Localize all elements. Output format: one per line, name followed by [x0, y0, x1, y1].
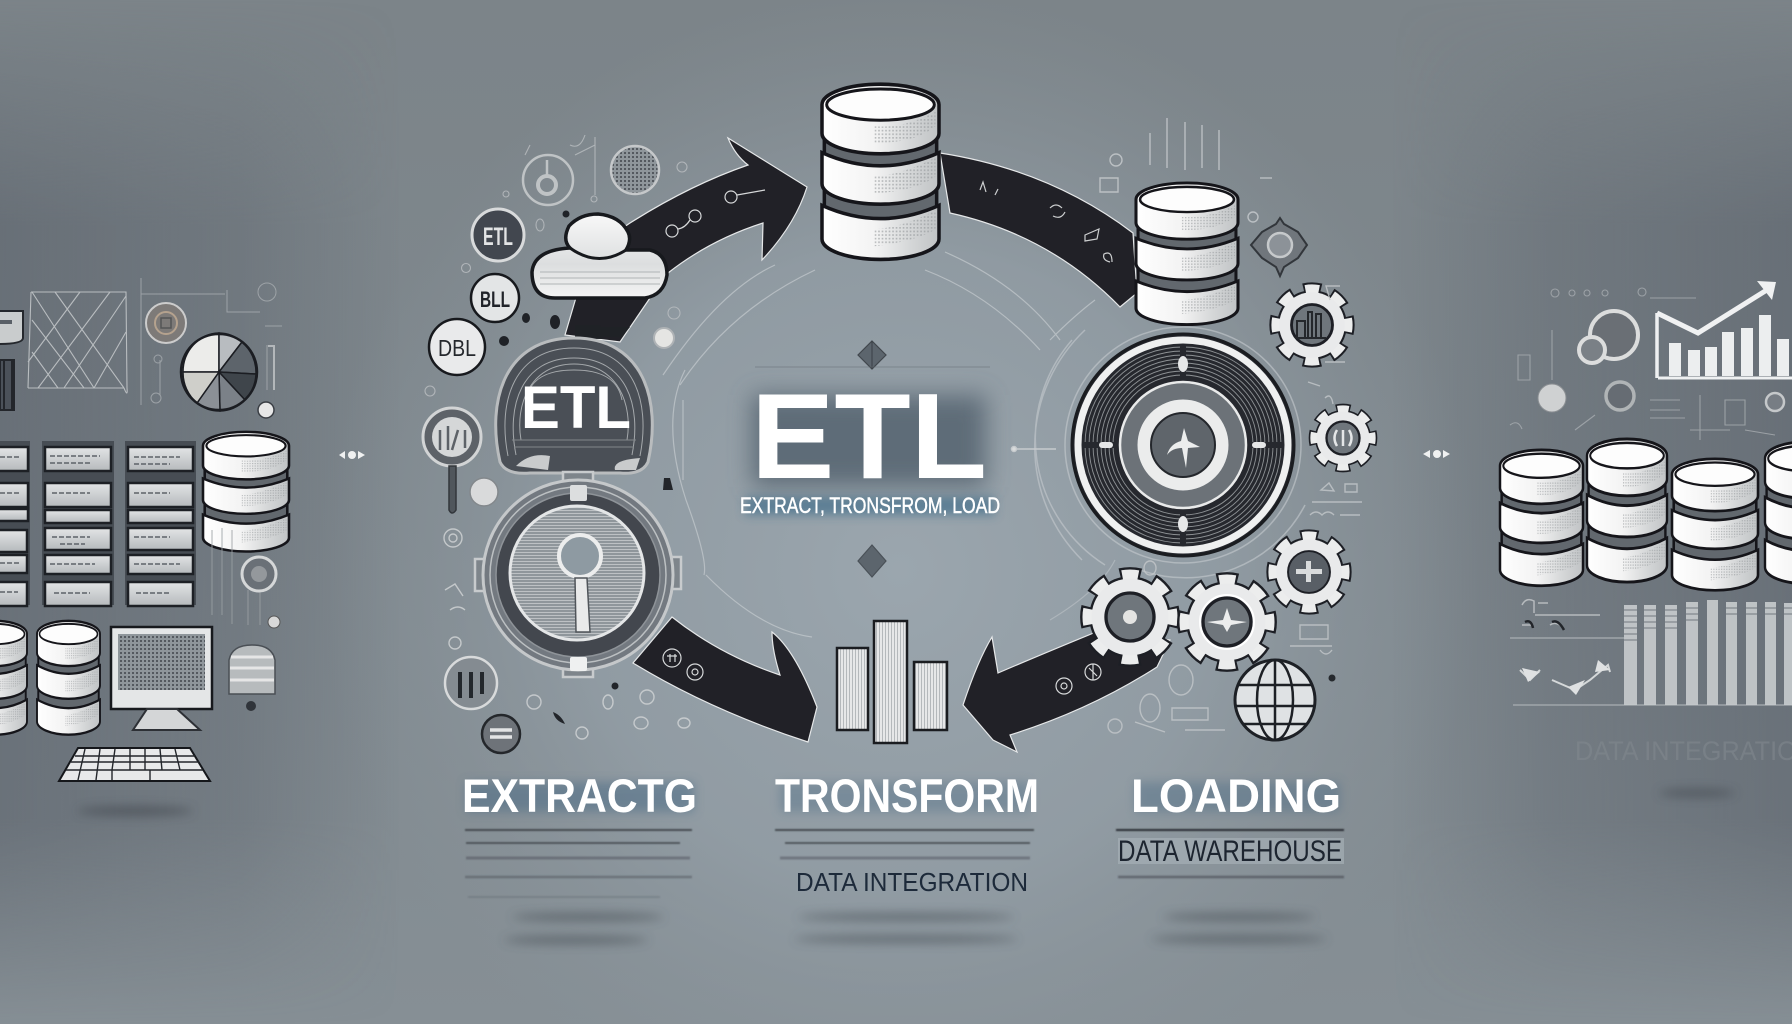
shadows — [794, 913, 1018, 943]
panel: right analytics — [1500, 281, 1792, 797]
frame tabs — [475, 472, 681, 677]
dial — [1035, 327, 1305, 578]
diamond: top — [858, 341, 886, 369]
shadows — [504, 913, 664, 944]
left edge icons — [0, 311, 274, 418]
monitor — [111, 627, 212, 730]
database: top centre — [822, 84, 939, 259]
small decor: top left — [425, 135, 687, 396]
dial pointer — [1012, 446, 1056, 452]
ring — [1606, 382, 1634, 410]
rule lines — [465, 830, 692, 897]
connector: left arrows — [339, 451, 365, 459]
key icon — [559, 535, 601, 632]
mesh diagram — [28, 292, 127, 393]
ring icon — [146, 303, 186, 343]
sub label: DATA INTEGRATION — [796, 867, 1028, 897]
badge: DBL: DBL — [438, 335, 476, 361]
column: transform — [775, 769, 1039, 943]
badge: bars — [445, 657, 497, 709]
heading: EXTRACTG — [462, 769, 697, 822]
faint circle lines — [663, 252, 1115, 637]
shadow — [77, 806, 193, 816]
small magnifier: left — [423, 408, 498, 513]
dial halo rings — [1035, 327, 1305, 578]
small dark marks — [553, 478, 673, 724]
sub label: DATA WAREHOUSE — [1118, 835, 1342, 868]
lens: ETL — [496, 338, 652, 473]
small notes — [141, 278, 282, 405]
small decor: right panel — [1510, 288, 1775, 440]
gear: C — [1273, 536, 1345, 608]
subtitle: EXTRACT, TRONSFROM, LOAD — [740, 493, 1000, 518]
gear: large B — [1185, 580, 1269, 664]
pie chart — [181, 333, 257, 411]
badge: ETL: ETL — [483, 223, 513, 251]
arrow: store to warehouse — [940, 153, 1137, 307]
databases — [1500, 439, 1792, 590]
column: loading — [1116, 769, 1344, 943]
badge: BLL — [471, 274, 519, 322]
decor: above right database — [1100, 118, 1272, 222]
blob ring — [1579, 311, 1638, 363]
column: extract — [462, 769, 697, 944]
gear: bars — [1276, 289, 1348, 361]
rule above title — [755, 366, 990, 368]
ring small — [1766, 393, 1784, 411]
bars: faded — [1624, 600, 1792, 705]
small drops: left cluster — [499, 210, 630, 346]
heading: TRONSFORM — [775, 769, 1039, 822]
gear: large A — [1088, 575, 1172, 659]
database: right — [1136, 183, 1238, 325]
database: left — [203, 432, 289, 552]
heading: LOADING — [1131, 769, 1341, 822]
badge: ETL — [472, 209, 524, 261]
small lens and lines — [212, 528, 280, 628]
chart: growth — [1657, 281, 1792, 378]
sphere — [1538, 384, 1566, 412]
shadows — [1151, 913, 1327, 943]
arrow: extract to store — [565, 138, 807, 342]
small cabinet — [229, 645, 275, 711]
panel: left data sources — [0, 278, 289, 816]
connector: right arrows — [1423, 450, 1450, 458]
gear: book — [1314, 409, 1372, 467]
sphere: pearl — [654, 328, 674, 348]
small decor: right cluster — [1108, 286, 1362, 733]
keyboard — [59, 748, 210, 781]
database: bottom left — [0, 621, 100, 735]
bar chart: transform — [837, 621, 947, 743]
table rows — [0, 441, 196, 606]
seal inner hatch — [510, 506, 644, 640]
badge: small stack — [482, 715, 520, 753]
shadow — [1659, 789, 1735, 797]
line chart: faded — [1510, 600, 1792, 705]
badge: BLL: BLL — [480, 287, 510, 312]
arrow: warehouse to transform — [963, 632, 1170, 752]
arrow: extract return to transform — [633, 617, 817, 742]
gear: small target — [1251, 218, 1307, 276]
title: ETL: ETL — [751, 368, 987, 504]
lens: magnifier seal — [475, 472, 681, 677]
dial hatch — [1085, 347, 1281, 543]
diamond: bottom — [858, 545, 886, 577]
ring icon — [523, 155, 573, 205]
badge: DBL — [429, 319, 485, 375]
cloud — [532, 214, 667, 298]
globe — [1235, 660, 1315, 740]
mesh disc — [611, 146, 659, 194]
rule lines — [775, 830, 1034, 858]
small decor: lower left — [444, 529, 690, 739]
rule lines — [1116, 830, 1344, 877]
lens: ETL: ETL — [521, 374, 631, 441]
